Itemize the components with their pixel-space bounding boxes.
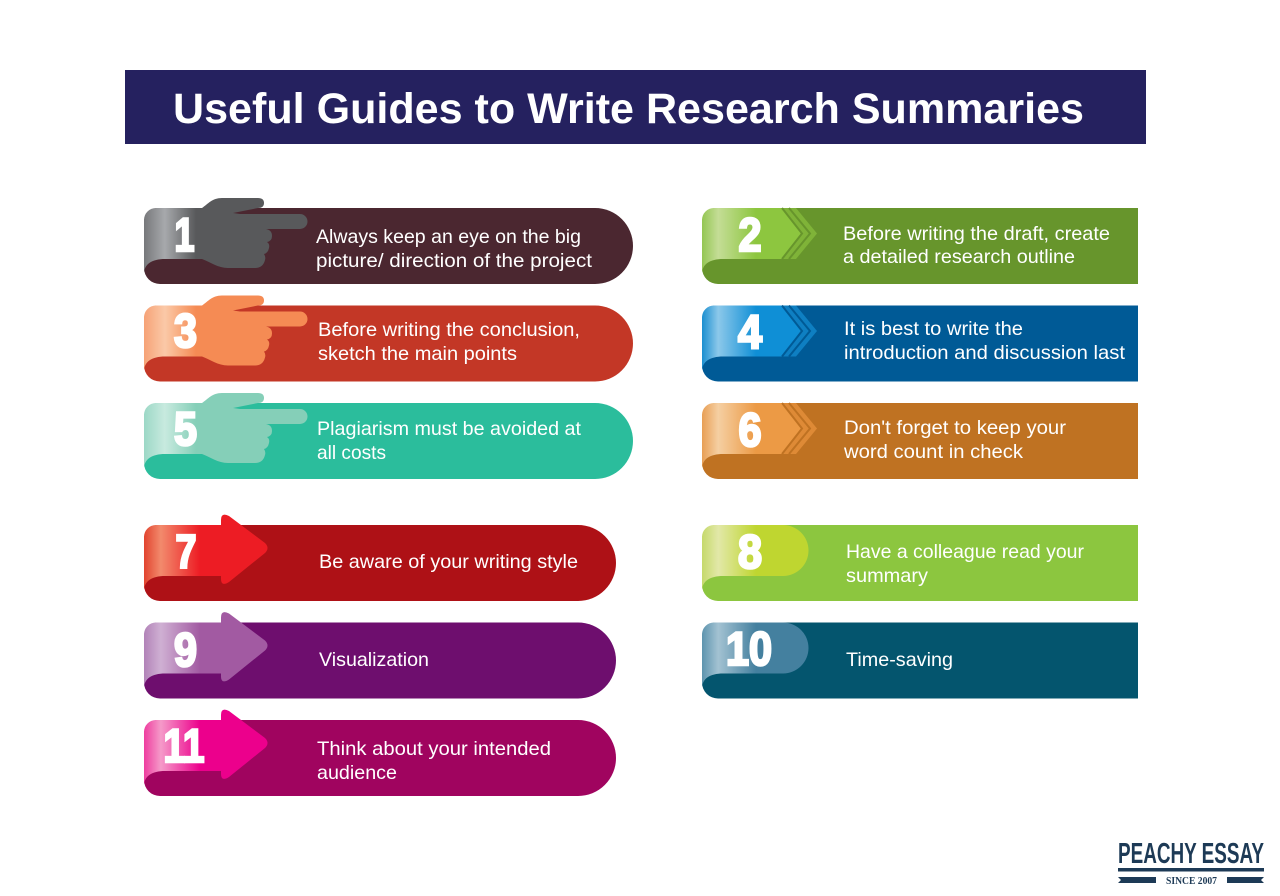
panel: guide 1: picture/ direction of the project <box>316 250 593 272</box>
panel: guide 7: 7 <box>176 525 196 578</box>
panel: guide 9: 9 <box>174 623 197 676</box>
icon: chevron tab 4 <box>702 306 817 372</box>
panel: guide 2 <box>702 208 1138 284</box>
panel: guide 3: 3 <box>174 304 197 357</box>
panel: guide 10: 10 <box>726 622 772 675</box>
panel: guide 10: Time-saving <box>846 649 953 671</box>
icon: arrow tab 11 <box>144 710 268 786</box>
panel: guide 2: 2 <box>738 208 762 261</box>
title banner: Useful Guides to Write Research Summaries <box>173 85 1084 133</box>
icon: arrow tab 7 <box>144 515 268 591</box>
icon: pointing hand 5 <box>196 393 308 463</box>
icon: rounded tab 10 <box>702 622 808 688</box>
panel: guide 5: all costs <box>317 442 386 464</box>
icon: rounded tab 8 <box>702 525 808 591</box>
panel: guide 8 <box>702 525 1138 601</box>
panel: guide 9: Visualization <box>319 649 429 671</box>
icon: chevron tab 6 <box>702 403 817 469</box>
panel: guide 5 <box>144 393 633 479</box>
panel: guide 1 <box>144 198 633 284</box>
panel: guide 10 <box>702 622 1138 698</box>
panel: guide 8: 8 <box>738 525 762 578</box>
panel: guide 4: It is best to write the <box>844 318 1023 340</box>
panel: guide 3: sketch the main points <box>318 343 517 365</box>
title banner <box>125 70 1146 144</box>
panel: guide 3 <box>144 296 633 382</box>
panel: guide 3: Before writing the conclusion, <box>318 319 580 341</box>
panel: guide 1: Always keep an eye on the big <box>316 226 581 248</box>
icon: chevron tab 2 <box>702 208 817 274</box>
panel: guide 8: summary <box>846 565 928 587</box>
panel: guide 6 <box>702 403 1138 479</box>
logo: Peachy Essay: SINCE 2007 <box>1166 876 1217 887</box>
panel: guide 6: 6 <box>738 403 762 456</box>
panel: guide 4: introduction and discussion last <box>844 342 1126 364</box>
panel: guide 2: a detailed research outline <box>843 246 1075 268</box>
icon: pointing hand 3 <box>196 296 308 366</box>
panel: guide 5: 5 <box>174 402 197 455</box>
panel: guide 11: Think about your intended <box>317 738 551 760</box>
panel: guide 1: 1 <box>174 208 194 261</box>
panel: guide 2: Before writing the draft, create <box>843 223 1110 245</box>
panel: guide 4: 4 <box>738 305 762 358</box>
panel: guide 6: word count in check <box>843 441 1023 463</box>
panel: guide 9 <box>144 612 616 698</box>
icon: pointing hand 1 <box>196 198 308 268</box>
panel: guide 6: Don't forget to keep your <box>844 417 1067 439</box>
panel: guide 8: Have a colleague read your <box>846 541 1084 563</box>
panel: guide 11: 11 <box>164 719 204 772</box>
logo: Peachy Essay <box>1118 838 1264 887</box>
panel: guide 7 <box>144 515 616 601</box>
panel: guide 11 <box>144 710 616 796</box>
panel: guide 11: audience <box>317 762 397 784</box>
icon: arrow tab 9 <box>144 612 268 688</box>
panel: guide 5: Plagiarism must be avoided at <box>317 418 582 440</box>
panel: guide 7: Be aware of your writing style <box>319 551 578 573</box>
panel: guide 4 <box>702 305 1138 382</box>
